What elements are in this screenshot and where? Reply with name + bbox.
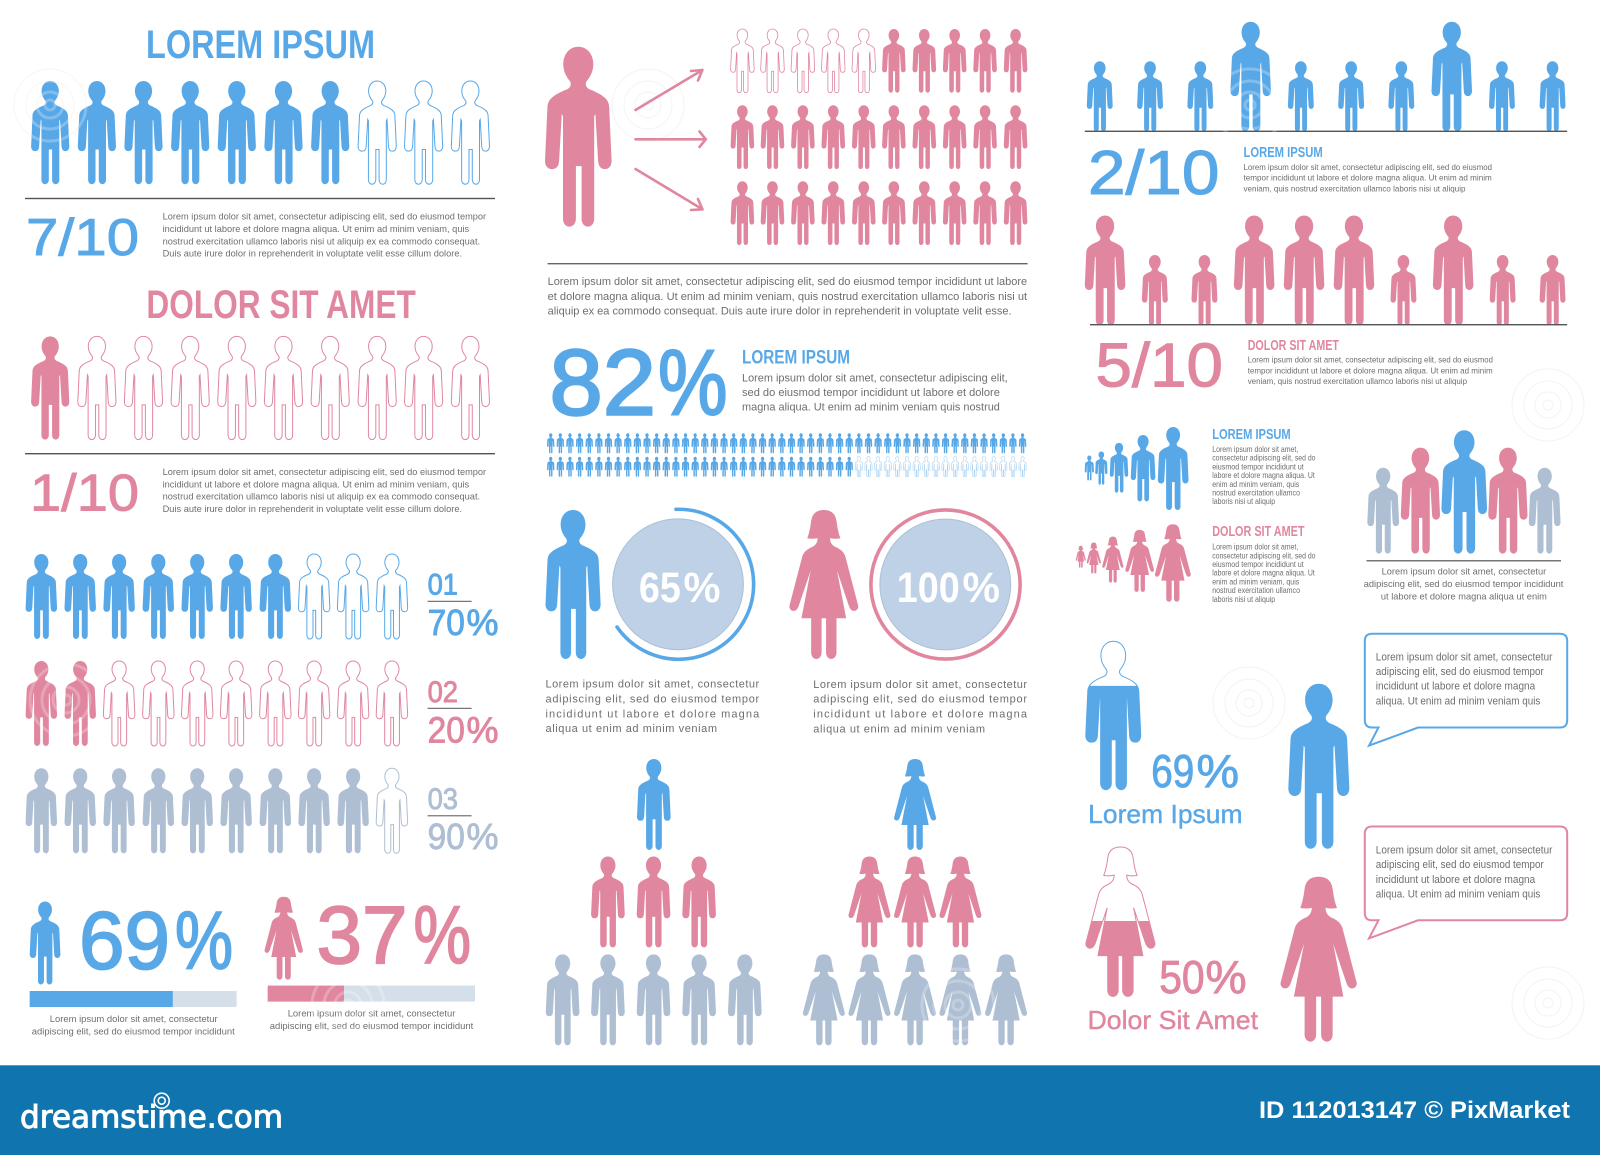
text block: 1/10 description: Lorem ipsum dolor sit amet, consectetur adipiscing elit, sed do eiusmod tempor — [163, 467, 486, 478]
text block: group description: adipiscing elit, sed do eiusmod tempor incididunt — [1364, 579, 1564, 590]
stat: man 69% with progress bar: % — [175, 896, 233, 986]
icon: pink woman speaking — [1281, 877, 1357, 1042]
stat: 50% dolor sit amet — [1088, 951, 1259, 1035]
label: 03 90% — [428, 783, 498, 857]
text block: 82% description: magna aliqua. Ut enim ad minim veniam quis nostrud — [742, 402, 1000, 414]
stat: woman 37% with progress bar: Lorem ipsum dolor sit amet, consectetur — [288, 1009, 455, 1020]
text block: 82% description — [742, 373, 1008, 414]
stat: man 69% with progress bar: Lorem ipsum dolor sit amet, consectetur — [50, 1014, 218, 1025]
label: 01 70% — [428, 569, 498, 643]
speech bubble: blue: incididunt ut labore et dolore magna — [1376, 681, 1536, 693]
label: 02 20%: % — [466, 709, 498, 750]
stat: woman 37% with progress bar: adipiscing elit, sed do eiusmod tempor incididunt — [270, 1021, 474, 1032]
text block: man gauge description — [546, 678, 760, 735]
heading and text: lorem ipsum: veniam, quis nostrud exercitation ullamco laboris nisi ut aliquip — [1244, 183, 1466, 193]
text block: group description: Lorem ipsum dolor sit amet, consectetur — [1382, 566, 1546, 578]
stat: 1/10: 1/10 — [30, 464, 139, 522]
text block: 1/10 description: Duis aute irure dolor in reprehenderit in voluptate velit esse cillum dolore. — [163, 504, 462, 515]
heading and text: men growth: Lorem ipsum dolor sit amet, — [1212, 444, 1298, 454]
text block: woman gauge description: aliqua ut enim ad minim veniam — [813, 724, 985, 736]
stat: man 69% with progress bar: adipiscing elit, sed do eiusmod tempor incididunt — [32, 1026, 235, 1037]
heading and text: dolor sit amet: DOLOR SIT AMET — [1248, 337, 1339, 354]
stat: 69% lorem ipsum: % — [1196, 745, 1239, 797]
growth chart: men — [1085, 427, 1189, 510]
pictogram row 03: 90% — [26, 768, 408, 853]
donut gauge: 100%: 100 — [897, 564, 960, 612]
heading and text: men growth: nostrud exercitation ullamco — [1212, 487, 1300, 497]
stat: woman 37% with progress bar — [265, 890, 475, 1032]
stat: woman 37% with progress bar: 37 — [316, 890, 408, 981]
text block: 7/10 description: incididunt ut labore et dolore magna aliqua. Ut enim ad minim veniam, quis — [163, 224, 469, 235]
icon: man filled 69% — [1086, 641, 1141, 790]
speech bubble: pink: incididunt ut labore et dolore magna — [1376, 874, 1536, 886]
growth chart: women — [1076, 524, 1191, 602]
heading and text: lorem ipsum — [1244, 144, 1492, 193]
footer credit: ID 112013147 © PixMarket — [1259, 1097, 1570, 1124]
pictogram row 01: 70% — [26, 554, 408, 639]
icon: pink woman — [789, 510, 858, 659]
heading and text: men growth: labore et dolore magna aliqua. Ut — [1212, 470, 1315, 480]
pictogram row: 5 of 10 tall pink — [1085, 216, 1565, 325]
heading and text: women growth: Lorem ipsum dolor sit amet, — [1212, 542, 1298, 552]
heading and text: men growth: eiusmod tempor incididunt ut — [1212, 461, 1304, 471]
heading and text: lorem ipsum: Lorem ipsum dolor sit amet, consectetur adipiscing elit, sed do eiusmod — [1244, 162, 1492, 172]
stat: 82%: % — [658, 330, 728, 434]
text block: grid description: aliquip ex ea commodo consequat. Duis aute irure dolor in reprehenderit in voluptate velit esse. — [548, 306, 1012, 318]
pictogram row: 2 of 10 tall blue — [1087, 22, 1565, 131]
icon: blue man — [546, 510, 601, 659]
stat: 50% dolor sit amet: % — [1206, 951, 1246, 1003]
heading and text: dolor sit amet: Lorem ipsum dolor sit amet, consectetur adipiscing elit, sed do eiusmod — [1248, 355, 1493, 365]
donut gauge: 100%: % — [962, 564, 1000, 612]
text block: man gauge description: incididunt ut labore et dolore magna — [546, 708, 760, 720]
text block: group description — [1364, 566, 1564, 602]
speech bubble: pink: aliqua. Ut enim ad minim veniam quis — [1376, 888, 1541, 900]
text block: woman gauge description: incididunt ut labore et dolore magna — [813, 709, 1028, 721]
heading: lorem ipsum small: LOREM IPSUM — [742, 347, 850, 368]
heading and text: women growth: nostrud exercitation ullamco — [1212, 585, 1300, 595]
donut gauge: 65%: % — [684, 564, 720, 612]
stat: 82% — [550, 330, 728, 434]
heading and text: women growth: DOLOR SIT AMET — [1212, 523, 1304, 540]
text block: woman gauge description: adipiscing elit, sed do eiusmod tempor — [813, 694, 1027, 706]
speech bubble: pink — [1365, 826, 1567, 938]
pictogram strip: 82 of 100 — [547, 433, 1026, 477]
stat: man 69% with progress bar: 69 — [79, 896, 170, 986]
text block: 1/10 description: incididunt ut labore et dolore magna aliqua. Ut enim ad minim veniam, quis — [163, 479, 469, 490]
speech bubble: blue — [1365, 634, 1567, 746]
heading and text: women growth: eiusmod tempor incididunt ut — [1212, 559, 1304, 569]
speech bubble: blue: adipiscing elit, sed do eiusmod tempor — [1376, 666, 1544, 678]
heading and text: dolor sit amet — [1248, 337, 1493, 386]
donut gauge: 100% — [871, 510, 1020, 659]
pictogram row 02: 20% — [26, 661, 408, 746]
heading: dolor sit amet: DOLOR SIT AMET — [146, 283, 416, 327]
text block: grid description: Lorem ipsum dolor sit amet, consectetur adipiscing elit, sed do eiusmod tempor incididunt ut labore — [548, 276, 1027, 288]
label: 03 90%: % — [466, 816, 498, 857]
pictogram row: 7 of 10 blue — [31, 81, 489, 184]
text block: man gauge description: aliqua ut enim ad minim veniam — [546, 723, 717, 735]
stat: woman 37% with progress bar: % — [414, 890, 471, 981]
pictogram row: 1 of 10 pink — [31, 336, 489, 440]
label: 03 90%: 03 — [428, 783, 458, 816]
label: 02 20% — [428, 676, 498, 750]
donut gauge: 65%: 65 — [639, 564, 681, 612]
label: 01 70%: 01 — [428, 569, 458, 602]
heading: lorem ipsum: LOREM IPSUM — [146, 23, 375, 67]
heading and text: dolor sit amet: tempor incididunt ut labore et dolore magna aliqua. Ut enim ad minim — [1248, 365, 1493, 375]
label: 01 70%: % — [466, 602, 498, 643]
heading and text: men growth: consectetur adipiscing elit, sed do — [1212, 453, 1316, 463]
icon: woman filled 50% — [1086, 847, 1155, 996]
heading and text: men growth — [1212, 426, 1316, 506]
text block: 1/10 description — [163, 467, 486, 515]
text block: group description: ut labore et dolore magna aliqua ut enim — [1381, 591, 1547, 602]
stat: 50% dolor sit amet: 50 — [1159, 951, 1205, 1003]
heading and text: women growth — [1212, 523, 1316, 604]
speech bubble: pink: adipiscing elit, sed do eiusmod tempor — [1376, 859, 1544, 871]
stat: 5/10: 5/10 — [1096, 332, 1223, 401]
label: 02 20%: 20 — [428, 709, 465, 750]
heading and text: men growth: enim ad minim veniam, quis — [1212, 479, 1299, 489]
text block: grid description: et dolore magna aliqua. Ut enim ad minim veniam, quis nostrud exercitation ullamco laboris nisi ut — [548, 291, 1027, 303]
heading and text: dolor sit amet: veniam, quis nostrud exercitation ullamco laboris nisi ut aliquip — [1248, 376, 1467, 386]
text block: 7/10 description: Duis aute irure dolor in reprehenderit in voluptate velit esse cillum dolore. — [163, 249, 462, 260]
heading and text: women growth: labore et dolore magna aliqua. Ut — [1212, 568, 1315, 578]
stat: 7/10: 7/10 — [26, 209, 139, 267]
icon: blue man speaking — [1288, 684, 1349, 849]
text block: man gauge description: Lorem ipsum dolor sit amet, consectetur — [546, 678, 760, 690]
speech bubble: pink: Lorem ipsum dolor sit amet, consectetur — [1376, 844, 1553, 856]
stat: 69% lorem ipsum: Lorem Ipsum — [1088, 799, 1242, 829]
stat: man 69% with progress bar — [30, 896, 237, 1037]
speech bubble: blue: aliqua. Ut enim ad minim veniam quis — [1376, 695, 1541, 707]
arrows: one to many — [636, 70, 706, 210]
pictogram grid: 25 of 30 pink — [731, 29, 1027, 245]
heading and text: women growth: enim ad minim veniam, quis — [1212, 576, 1299, 586]
group of five people — [1367, 430, 1561, 554]
heading and text: men growth: laboris nisi ut aliquip — [1212, 496, 1275, 506]
heading and text: women growth: laboris nisi ut aliquip — [1212, 594, 1275, 604]
stat: 82%: 82 — [550, 330, 656, 434]
speech bubble: blue: Lorem ipsum dolor sit amet, consectetur — [1376, 651, 1553, 663]
stat: 50% dolor sit amet: Dolor Sit Amet — [1088, 1005, 1259, 1035]
heading and text: lorem ipsum: tempor incididunt ut labore et dolore magna aliqua. Ut enim ad minim — [1244, 173, 1492, 183]
heading and text: men growth: LOREM IPSUM — [1212, 426, 1291, 443]
text block: woman gauge description — [813, 679, 1028, 736]
icon: large pink man — [545, 47, 612, 227]
text block: 1/10 description: nostrud exercitation ullamco laboris nisi ut aliquip ex ea commodo consequat. — [163, 492, 480, 503]
text block: woman gauge description: Lorem ipsum dolor sit amet, consectetur — [813, 679, 1027, 691]
text block: 7/10 description — [163, 212, 486, 260]
label: 03 90%: 90 — [428, 816, 465, 857]
text block: 82% description: sed do eiusmod tempor incididunt ut labore et dolore — [742, 387, 1000, 399]
text block: grid description — [548, 276, 1027, 318]
heading and text: women growth: consectetur adipiscing elit, sed do — [1212, 550, 1316, 560]
stat: 2/10: 2/10 — [1088, 139, 1219, 208]
text block: 7/10 description: nostrud exercitation ullamco laboris nisi ut aliquip ex ea commodo consequat. — [163, 236, 480, 247]
donut gauge: 65% — [613, 509, 754, 659]
heading and text: lorem ipsum: LOREM IPSUM — [1244, 144, 1323, 161]
logo: dreamstime: dreamstime.com — [20, 1100, 283, 1136]
text block: man gauge description: adipiscing elit, sed do eiusmod tempor — [546, 693, 760, 705]
footer banner — [0, 1065, 1600, 1155]
text block: 82% description: Lorem ipsum dolor sit amet, consectetur adipiscing elit, — [742, 373, 1008, 385]
stat: 69% lorem ipsum: 69 — [1151, 745, 1194, 797]
label: 01 70%: 70 — [428, 602, 465, 643]
text block: 7/10 description: Lorem ipsum dolor sit amet, consectetur adipiscing elit, sed do eiusmod tempor — [163, 212, 486, 223]
hierarchy pyramid: men — [546, 759, 762, 1045]
label: 02 20%: 02 — [428, 676, 458, 709]
hierarchy pyramid: women — [803, 759, 1027, 1045]
stat: 69% lorem ipsum — [1088, 745, 1242, 829]
